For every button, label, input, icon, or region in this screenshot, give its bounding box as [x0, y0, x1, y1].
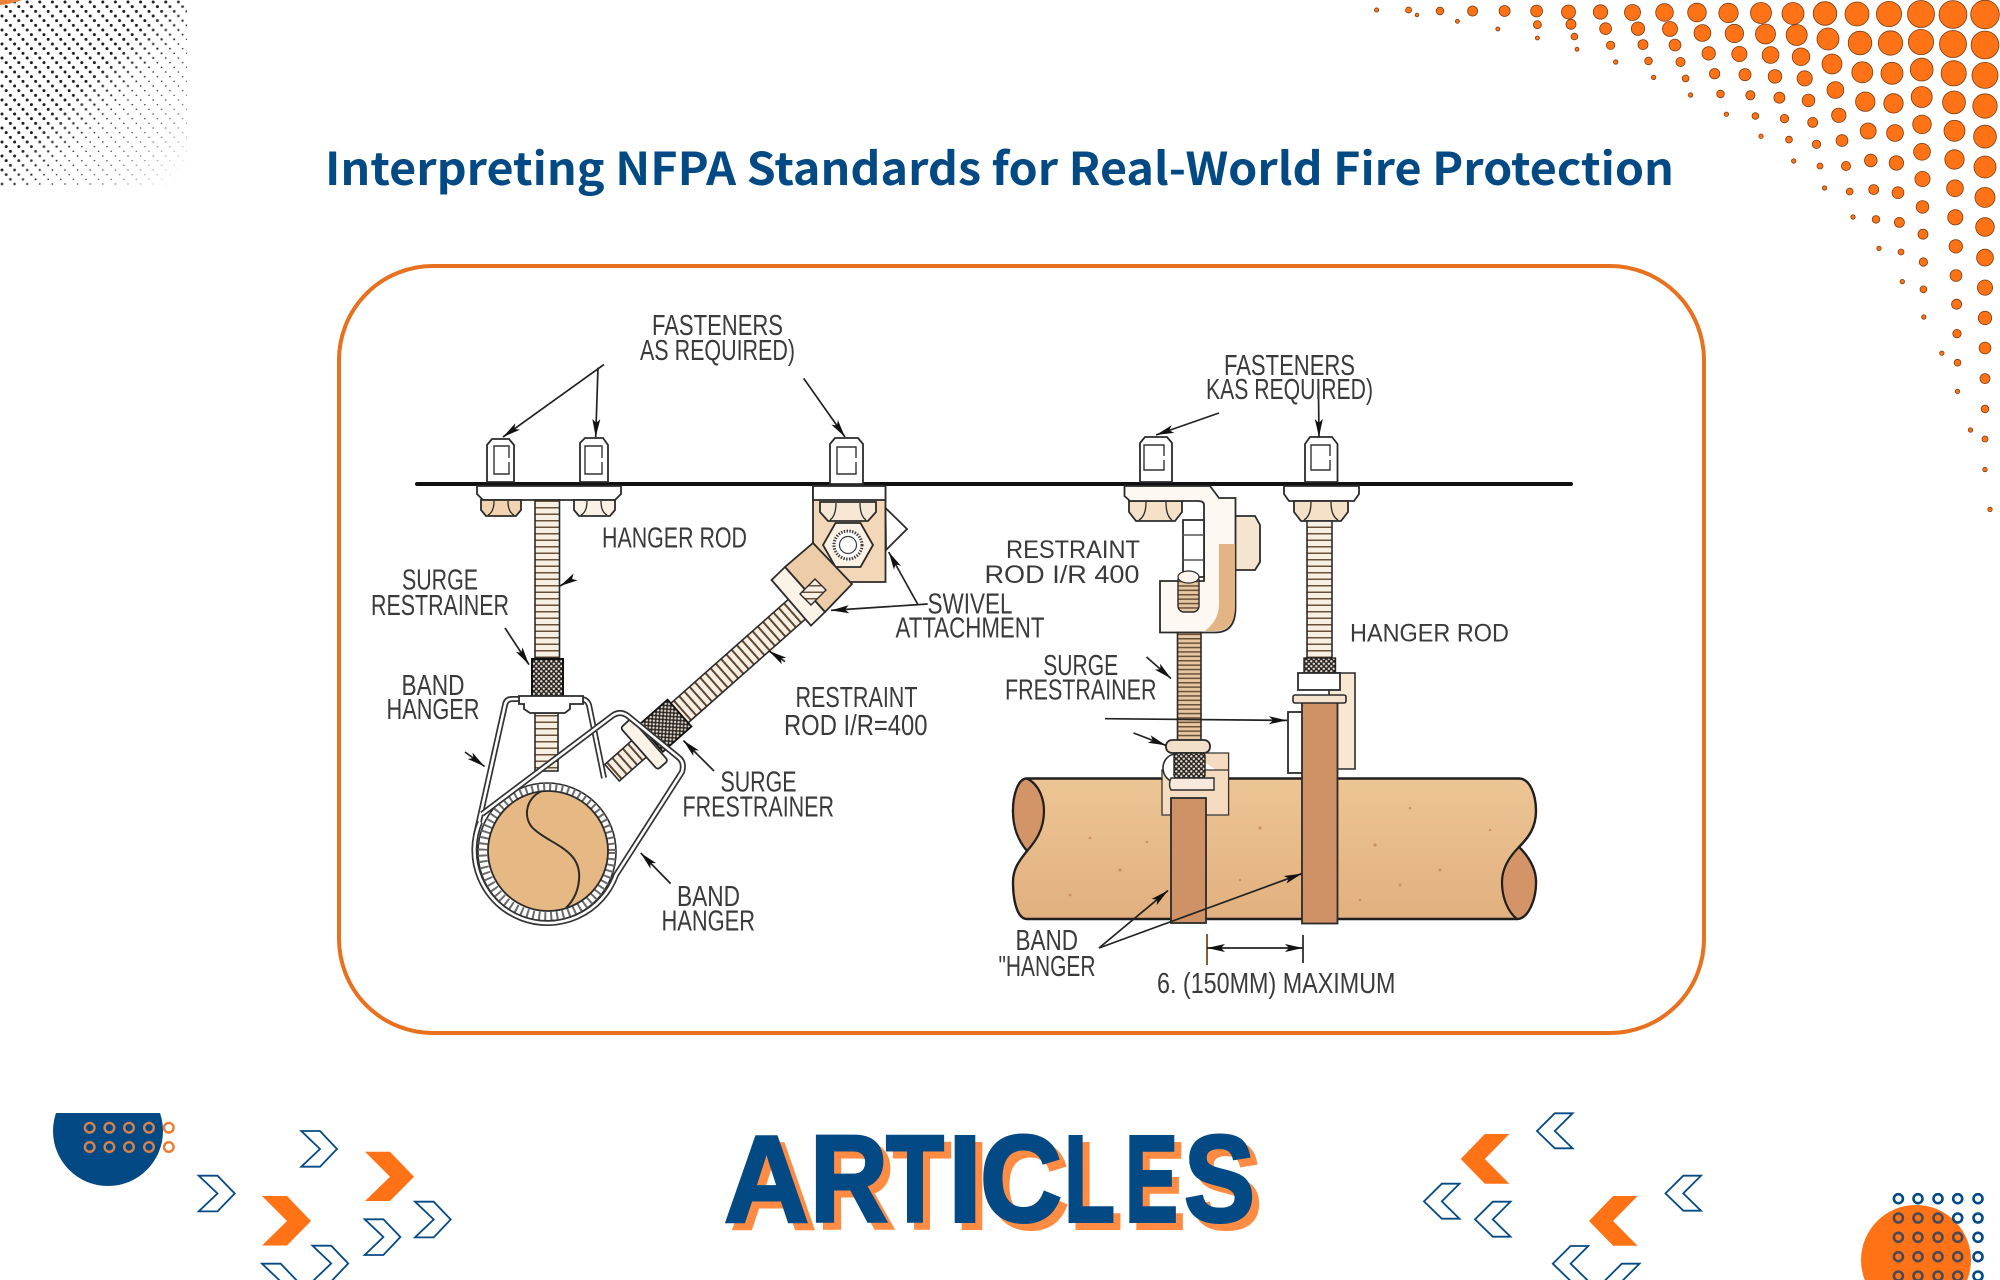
fastener 4 — [1140, 437, 1172, 482]
dimension: 6 inch maximum — [1207, 934, 1303, 965]
heading letters: T — [886, 1112, 944, 1248]
labels: left assembly: BAND — [402, 670, 464, 702]
heading: ARTICLES — [724, 1112, 1262, 1256]
labels: left assembly: FASTENERS — [652, 310, 783, 342]
L bracket — [1124, 486, 1236, 632]
hex nut — [823, 523, 873, 567]
side nuts — [1235, 516, 1260, 570]
labels: left assembly: FRESTRAINER — [682, 791, 834, 823]
decoration: left chevrons — [199, 1131, 451, 1280]
back plate — [1329, 673, 1355, 769]
hanger rod threads — [1307, 521, 1332, 658]
halftone: top left — [0, 0, 187, 187]
heading shadow: I — [955, 1118, 989, 1256]
saddle — [1170, 778, 1214, 790]
knurled coupling — [1304, 658, 1336, 673]
heading letters: E — [1125, 1112, 1178, 1248]
surge restrainer knurled coupling — [532, 659, 563, 697]
mounting plate and nuts — [477, 486, 621, 516]
restraint rod threads — [671, 589, 817, 723]
diagram: diagonal restraint rod assembly — [594, 578, 827, 794]
diagram: swivel attachment — [772, 438, 907, 626]
pipe band 2 — [1302, 700, 1338, 924]
heading shadow: E — [1132, 1118, 1185, 1256]
knurled coupling — [1174, 753, 1205, 778]
fastener 3 — [830, 438, 863, 484]
swivel side tab — [886, 508, 907, 550]
labels: right assembly: KAS REQUIRED) — [1206, 374, 1373, 406]
pipe left end — [1013, 778, 1044, 851]
labels: left assembly: SURGE — [402, 565, 478, 597]
pipe speckles — [1069, 807, 1491, 901]
diagram: right hanger rod assembly — [1284, 437, 1359, 924]
decoration: right chevrons — [1424, 1113, 1701, 1280]
labels: left assembly: RESTRAINT — [796, 682, 918, 714]
heading letters — [724, 1112, 1255, 1248]
labels: left assembly — [371, 310, 1045, 938]
heading shadow: R — [817, 1118, 895, 1256]
heading letters: S — [1184, 1112, 1255, 1248]
labels: right assembly: RESTRAINT — [1006, 536, 1140, 564]
threaded rod — [1178, 632, 1201, 740]
heading letters: I — [948, 1112, 982, 1248]
labels: left assembly: SURGE — [720, 767, 796, 799]
heading shadow: A — [731, 1118, 816, 1256]
flat washer — [1293, 695, 1346, 703]
washer — [620, 719, 668, 770]
upper block — [1298, 673, 1340, 690]
heading letters: C — [980, 1112, 1062, 1248]
heading shadow — [731, 1118, 1262, 1256]
labels: left assembly: HANGER — [386, 694, 480, 726]
labels: left assembly: AS REQUIRED) — [640, 335, 795, 367]
decoration: bottom left blue bowl with rings — [53, 1113, 175, 1186]
labels: right assembly: SURGE — [1043, 650, 1118, 682]
labels: left assembly: ATTACHMENT — [896, 613, 1045, 645]
inner nut — [1183, 520, 1204, 577]
left box — [1288, 712, 1304, 773]
swivel clevis — [785, 543, 852, 612]
labels: left assembly: RESTRAINER — [371, 590, 509, 622]
heading shadow: S — [1191, 1118, 1262, 1256]
hanger clamp washer — [519, 696, 583, 713]
knurled coupling — [639, 700, 691, 752]
panel: diagram card — [339, 266, 1704, 1033]
arrows: right assembly — [1099, 385, 1319, 948]
labels: left assembly: SWIVEL — [928, 588, 1012, 620]
fastener 1 — [487, 439, 514, 482]
heading shadow: C — [987, 1118, 1069, 1256]
fastener 5 — [1305, 437, 1338, 482]
halftone: top right orange dots — [1374, 0, 1999, 512]
fastener 2 — [580, 438, 608, 482]
labels: right assembly: BAND — [1016, 925, 1078, 957]
labels: left assembly: HANGER ROD — [602, 522, 747, 554]
diagram: right pipe — [1013, 778, 1536, 919]
top nut — [1129, 501, 1182, 521]
labels: right assembly: FRESTRAINER — [1005, 674, 1156, 706]
band clamp outline — [1162, 753, 1229, 815]
labels: right assembly — [984, 350, 1509, 1000]
bolt end — [1178, 571, 1199, 612]
diagram: ceiling beam line — [415, 482, 1573, 486]
labels: right assembly: ROD I/R 400 — [984, 561, 1140, 589]
hanger rod threads — [535, 500, 560, 658]
diagram: tilted band hanger — [474, 713, 683, 923]
arrows: left assembly — [465, 364, 928, 884]
decoration: bottom right orange circle with rings — [1861, 1194, 1982, 1280]
heading shadow: L — [1071, 1118, 1122, 1256]
labels: right assembly: FASTENERS — [1224, 350, 1355, 382]
title: Interpreting NFPA Standards for Real-World Fire Protection — [325, 133, 1674, 198]
heading letters: L — [1064, 1112, 1115, 1248]
lower hanger rod — [535, 713, 558, 771]
diagram: right restraint rod bracket — [1124, 437, 1260, 923]
heading letters: R — [810, 1112, 888, 1248]
pipe body — [1013, 778, 1536, 919]
labels: right assembly: "HANGER — [998, 951, 1096, 983]
labels: left assembly: ROD I/R=400 — [784, 710, 928, 742]
pipe right end — [1502, 847, 1536, 919]
labels: right assembly: 6. (150MM) MAXIMUM — [1157, 968, 1396, 1000]
heading letters: A — [724, 1112, 809, 1248]
labels: left assembly: BAND — [677, 881, 740, 913]
pipe band 1 — [1171, 798, 1206, 923]
collar — [1166, 740, 1210, 753]
loop — [1163, 754, 1189, 782]
lower bolt — [605, 739, 648, 781]
plate and nut — [1284, 486, 1359, 521]
band hanger double line — [476, 699, 604, 835]
swivel plate — [813, 486, 886, 582]
labels: left assembly: HANGER — [662, 906, 755, 938]
diagram: left hanger assembly — [476, 438, 621, 835]
labels: right assembly: HANGER ROD — [1350, 619, 1509, 647]
diagram: pipe cross section — [478, 783, 616, 921]
heading shadow: T — [893, 1118, 951, 1256]
